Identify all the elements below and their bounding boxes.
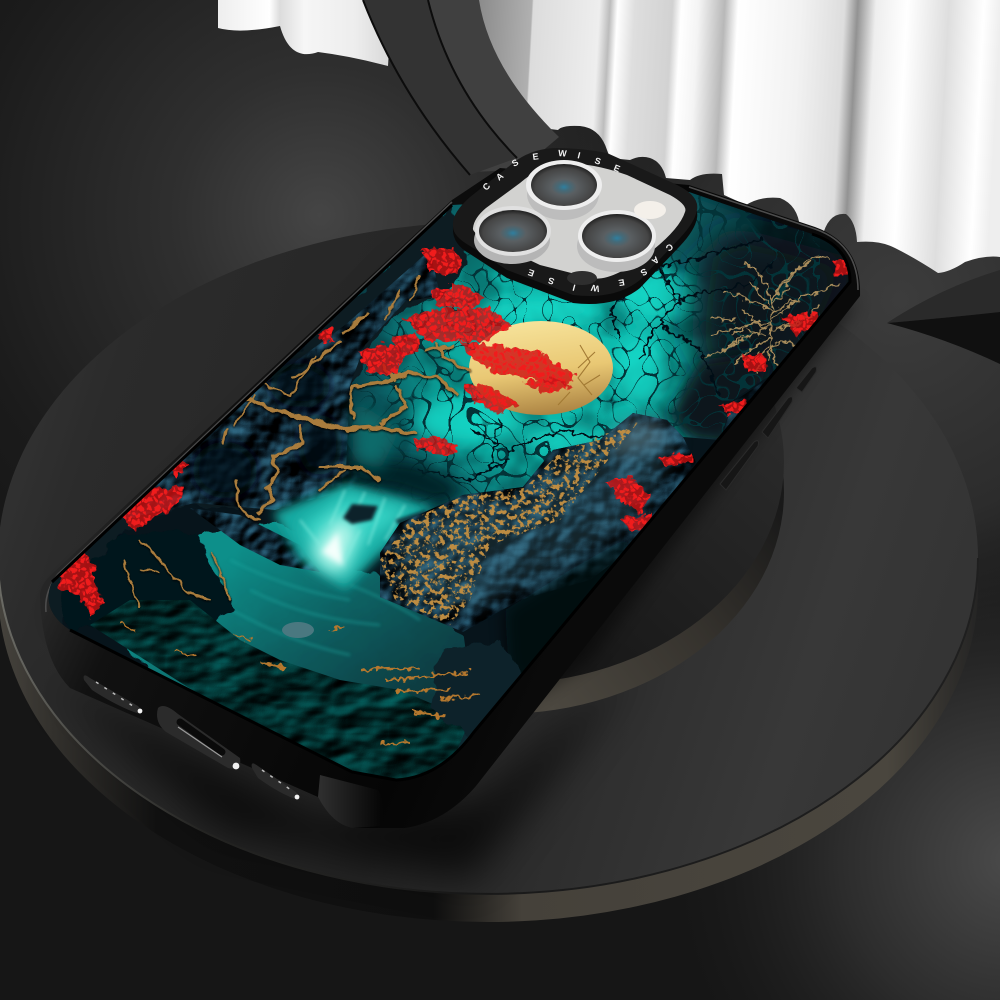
case: side wall and back shell xyxy=(40,168,860,828)
artwork: red blossoms right xyxy=(607,258,850,532)
camera: bumper top face xyxy=(453,148,697,296)
rocks: relief facets xyxy=(120,250,440,520)
stand: outer arc band xyxy=(428,0,559,172)
phone case xyxy=(40,168,860,828)
artwork: dark wedge rocks at lower right xyxy=(430,640,522,737)
artwork: teal lower rocks xyxy=(90,600,470,790)
artwork: dark cave under moon xyxy=(350,455,470,505)
artwork: gold streaks on lower water xyxy=(120,622,480,745)
rocks: lighter blue wash xyxy=(400,425,680,610)
falls: foam streaks xyxy=(298,489,406,546)
curtain: left white drape xyxy=(218,0,392,66)
pedestal: shadow under phone xyxy=(50,260,640,880)
pedestal: large disc xyxy=(0,222,978,922)
stand: inner arc band xyxy=(363,0,517,175)
artwork: waterfall xyxy=(273,483,433,590)
artwork: darker mottled patches in sky xyxy=(370,214,762,504)
camera: bumper side xyxy=(453,156,697,304)
camera: casewise branding upper: CASEWISE xyxy=(481,148,622,192)
artwork: pale rock in water xyxy=(282,622,314,638)
camera: flash xyxy=(634,201,666,219)
phone artwork panel xyxy=(48,192,848,778)
camera: glass plate xyxy=(473,163,685,279)
case: speaker cutout left xyxy=(84,675,142,714)
case: charging port cutout xyxy=(157,706,240,769)
phone: contact shadow on small disc xyxy=(500,300,860,720)
case: glossy rim highlight xyxy=(46,187,858,612)
rocks: almost black base shadow xyxy=(505,530,640,690)
camera: lens left xyxy=(474,206,551,264)
artwork: dark base xyxy=(48,212,848,668)
artwork: gold moon xyxy=(469,321,613,415)
artwork: moon crack lines xyxy=(558,345,600,405)
case: corner seam gloss xyxy=(318,775,383,828)
case: side button volume down xyxy=(762,397,792,438)
artwork: lower left water xyxy=(126,522,468,749)
camera module xyxy=(453,148,697,304)
case: side button volume up xyxy=(796,367,816,392)
camera: lens right xyxy=(577,210,656,272)
artwork: bright sky highlights xyxy=(415,269,693,456)
artwork: gold root tree right xyxy=(705,257,840,375)
rocks: pale highlight peak xyxy=(605,418,670,455)
camera: lens top xyxy=(526,160,602,220)
artwork: red blossoms left xyxy=(60,454,188,618)
artwork: upper teal haze xyxy=(664,201,756,274)
artwork: bare dark tree branches xyxy=(420,240,775,480)
pedestal: small upper disc xyxy=(534,425,784,712)
phone artwork edge line xyxy=(52,205,850,780)
artwork: sky deep teal lower xyxy=(352,400,400,470)
artwork: red blossoms main tree xyxy=(318,246,575,456)
camera: microphone sensor xyxy=(567,271,597,285)
display stand: right dark block xyxy=(887,270,1000,364)
artwork: blue ledge beside falls xyxy=(190,508,320,572)
artwork: dark patch above right rocks xyxy=(668,350,770,445)
rocks: deep crevice shadows xyxy=(193,363,342,498)
artwork: gold branches left rocks xyxy=(123,275,470,607)
artwork: central right rocks xyxy=(380,378,768,672)
camera: casewise branding lower: CASEWISE xyxy=(527,241,675,294)
rocks: relief facets xyxy=(380,413,700,632)
display stand: curved arc bands xyxy=(363,0,559,175)
artwork: dark left rock mass xyxy=(40,205,470,630)
case: speaker cutout right xyxy=(252,763,300,800)
rocks: gold veins xyxy=(380,420,640,625)
artwork: sky cracks xyxy=(360,190,820,510)
artwork: water streaks xyxy=(234,566,420,657)
artwork: teal sky glow xyxy=(348,192,756,511)
curtain: right white drape xyxy=(478,0,1000,273)
case: side button power xyxy=(720,441,758,490)
artwork: dark corner foliage shadow xyxy=(61,535,236,621)
artwork: dark cloud right xyxy=(690,225,860,400)
